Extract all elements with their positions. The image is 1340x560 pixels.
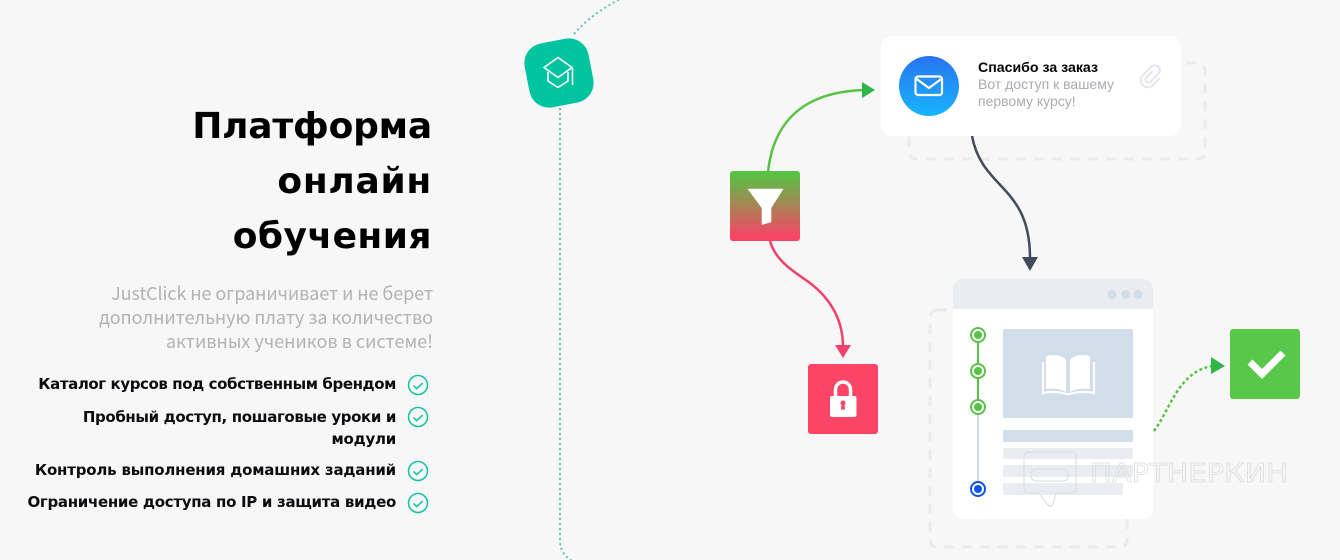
arrow: course page to check bbox=[1154, 357, 1225, 431]
title: Платформа bbox=[192, 106, 432, 147]
email body text: первому курсу! bbox=[978, 93, 1076, 109]
icon: check 2 bbox=[408, 408, 428, 426]
image placeholder with book icon bbox=[1003, 329, 1133, 418]
title bbox=[192, 106, 432, 257]
watermark bbox=[1024, 452, 1288, 506]
lesson timeline bbox=[971, 328, 985, 496]
description text: JustClick не ограничивает и не берет bbox=[111, 280, 433, 306]
icon: check 1 bbox=[408, 376, 428, 394]
feature: protection: Ограничение доступа по IP и защита видео bbox=[27, 493, 396, 511]
dashed frame behind course page bbox=[930, 310, 1127, 547]
feature: homework: Контроль выполнения домашних заданий bbox=[35, 461, 396, 479]
dashed frame behind email card bbox=[909, 63, 1205, 159]
icons: list checks bbox=[408, 376, 428, 512]
icon: paperclip bbox=[1138, 63, 1165, 90]
icon: lock bbox=[808, 364, 878, 434]
email body text: Вот доступ к вашему bbox=[978, 76, 1114, 92]
title: онлайн bbox=[277, 161, 432, 202]
window header bbox=[953, 279, 1153, 309]
icon: check square bbox=[1230, 329, 1300, 399]
email heading: Спасибо за заказ bbox=[978, 59, 1098, 75]
feature: trial access: модули bbox=[332, 430, 396, 448]
icon: funnel bbox=[730, 171, 800, 241]
panel: email card bbox=[881, 36, 1181, 136]
icon: graduation cap badge bbox=[521, 35, 597, 111]
dotted timeline bbox=[560, 0, 622, 560]
watermark: ПАРТНЕРКИН bbox=[1090, 459, 1288, 489]
feature list bbox=[27, 375, 396, 511]
icon: check 3 bbox=[408, 462, 428, 480]
feature: trial access bbox=[83, 408, 396, 448]
icon: envelope bbox=[899, 56, 959, 116]
panel: course page bbox=[953, 279, 1153, 519]
description text bbox=[99, 280, 433, 354]
arrow: funnel to email bbox=[768, 82, 875, 172]
description text: активных учеников в системе! bbox=[166, 328, 433, 354]
title: обучения bbox=[233, 216, 432, 257]
window dots bbox=[1108, 290, 1142, 299]
text line placeholders bbox=[1003, 430, 1133, 495]
arrow: email to course page bbox=[972, 136, 1038, 271]
feature: catalog: Каталог курсов под собственным брендом bbox=[38, 375, 396, 393]
description text: дополнительную плату за количество bbox=[99, 304, 433, 330]
arrow: funnel to lock bbox=[770, 241, 851, 358]
feature: trial access: Пробный доступ, пошаговые уроки и bbox=[83, 408, 396, 426]
icon: check 4 bbox=[408, 494, 428, 512]
